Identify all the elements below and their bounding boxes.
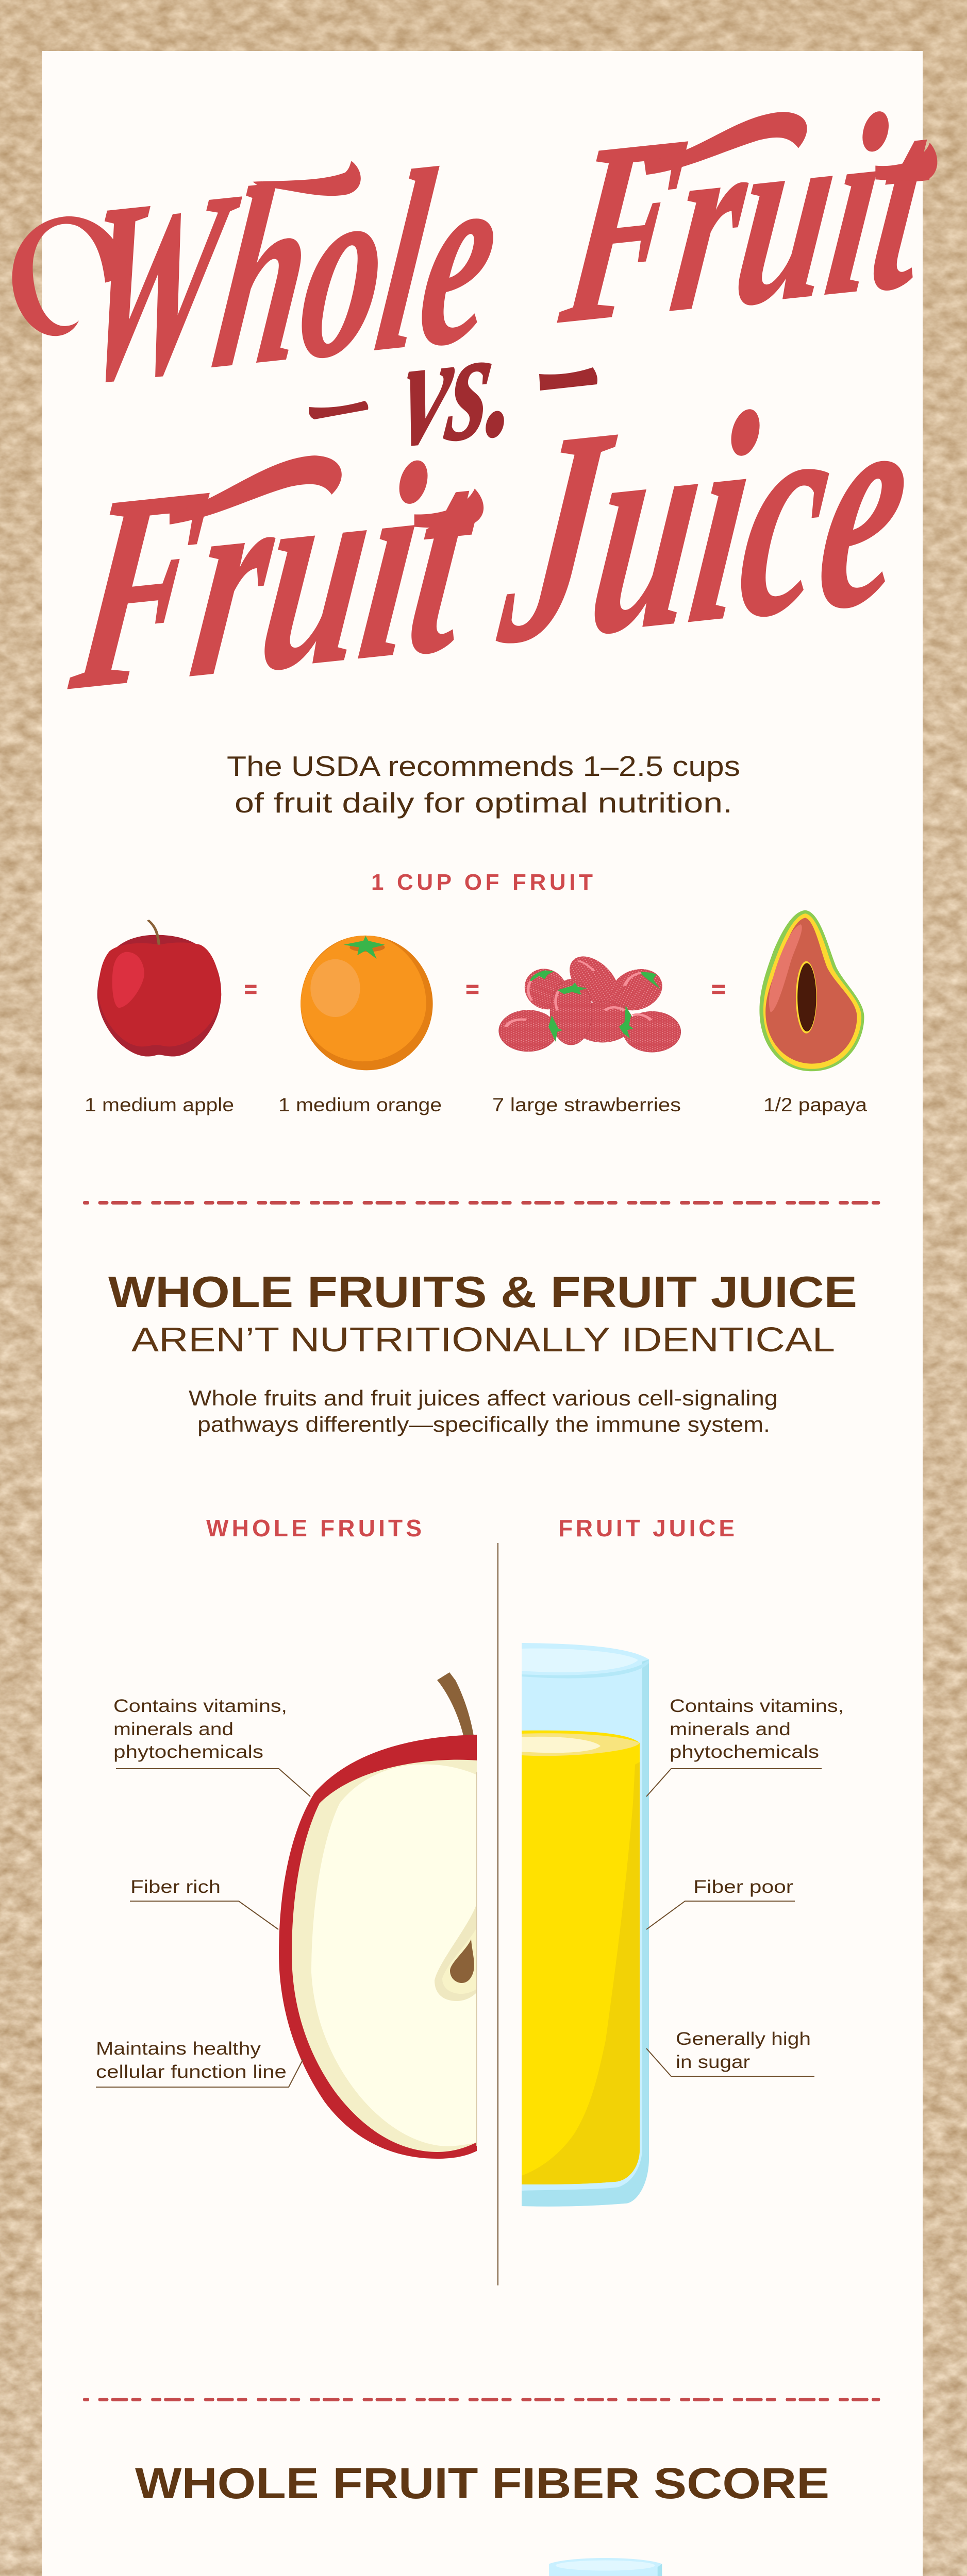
heading: whole fruits and fruit juice xyxy=(108,1268,857,1359)
heading: whole fruits and fruit juice: AREN’T NUTRITIONALLY IDENTICAL xyxy=(131,1320,835,1359)
callout: fiber poor: Fiber poor xyxy=(693,1877,793,1897)
text: cell signaling: pathways differently—specifically the immune system. xyxy=(197,1412,770,1436)
callout: fiber rich xyxy=(130,1877,278,1929)
callout: high in sugar: in sugar xyxy=(676,2052,750,2072)
callout: fiber rich: Fiber rich xyxy=(130,1877,221,1897)
equals sign xyxy=(245,985,257,994)
title word: Fruit second line: Fruit xyxy=(57,399,493,749)
equals sign xyxy=(466,985,478,994)
icon: strawberries xyxy=(499,953,681,1052)
equals sign xyxy=(712,985,725,994)
flourish: W entry loop xyxy=(12,216,130,336)
label: strawberries: 7 large strawberries xyxy=(492,1094,681,1115)
intro text: The USDA recommends 1–2.5 cups xyxy=(227,750,740,782)
icon: papaya xyxy=(759,910,864,1071)
callout: contains vitamins right: minerals and xyxy=(670,1719,791,1739)
title word: vs.: vs. xyxy=(393,293,530,479)
callout: contains vitamins left: phytochemicals xyxy=(113,1742,263,1762)
callout: high in sugar: Generally high xyxy=(676,2029,811,2049)
fruit equivalents xyxy=(85,910,867,1115)
center divider xyxy=(497,1543,498,2285)
vs dash right xyxy=(539,367,597,391)
intro text: of fruit daily for optimal nutrition. xyxy=(235,787,732,819)
heading: whole fruit fiber score: WHOLE FRUIT FIBER SCORE xyxy=(135,2459,829,2507)
icon: orange xyxy=(301,936,433,1070)
illustration: juice glass xyxy=(522,1643,649,2207)
callout: contains vitamins right: Contains vitamins, xyxy=(670,1696,844,1716)
text: cell signaling: Whole fruits and fruit juices affect various cell-signaling xyxy=(189,1386,778,1410)
callout: maintains healthy function xyxy=(96,2039,303,2087)
title xyxy=(12,55,949,749)
callout: contains vitamins right: phytochemicals xyxy=(670,1742,819,1762)
label: papaya: 1/2 papaya xyxy=(763,1094,867,1115)
heading: 1 cup of fruit: 1 CUP OF FRUIT xyxy=(371,870,593,895)
text: cell signaling xyxy=(189,1386,778,1436)
icon: grape juice glass xyxy=(549,2558,662,2576)
label: orange: 1 medium orange xyxy=(278,1094,442,1115)
callout: maintains healthy function: cellular function line xyxy=(96,2062,287,2082)
column heading: whole fruits: WHOLE FRUITS xyxy=(206,1515,422,1541)
callout: contains vitamins left: Contains vitamins, xyxy=(113,1696,287,1716)
callout: fiber poor xyxy=(646,1877,795,1929)
column heading: fruit juice: FRUIT JUICE xyxy=(558,1515,735,1541)
flourishes xyxy=(170,112,937,528)
callout: contains vitamins left xyxy=(113,1696,310,1797)
callout: high in sugar xyxy=(646,2029,814,2076)
label: apple: 1 medium apple xyxy=(85,1094,234,1115)
callout: contains vitamins left: minerals and xyxy=(113,1719,234,1739)
title word: Whole: Whole xyxy=(64,109,514,437)
vs dash left xyxy=(309,401,368,419)
illustration: halved apple xyxy=(279,1672,477,2159)
callout: maintains healthy function: Maintains healthy xyxy=(96,2039,261,2059)
intro text xyxy=(227,750,740,819)
callout: contains vitamins right xyxy=(646,1696,844,1797)
heading: whole fruits and fruit juice: WHOLE FRUITS & FRUIT JUICE xyxy=(108,1268,857,1317)
icon: apple xyxy=(97,920,221,1057)
